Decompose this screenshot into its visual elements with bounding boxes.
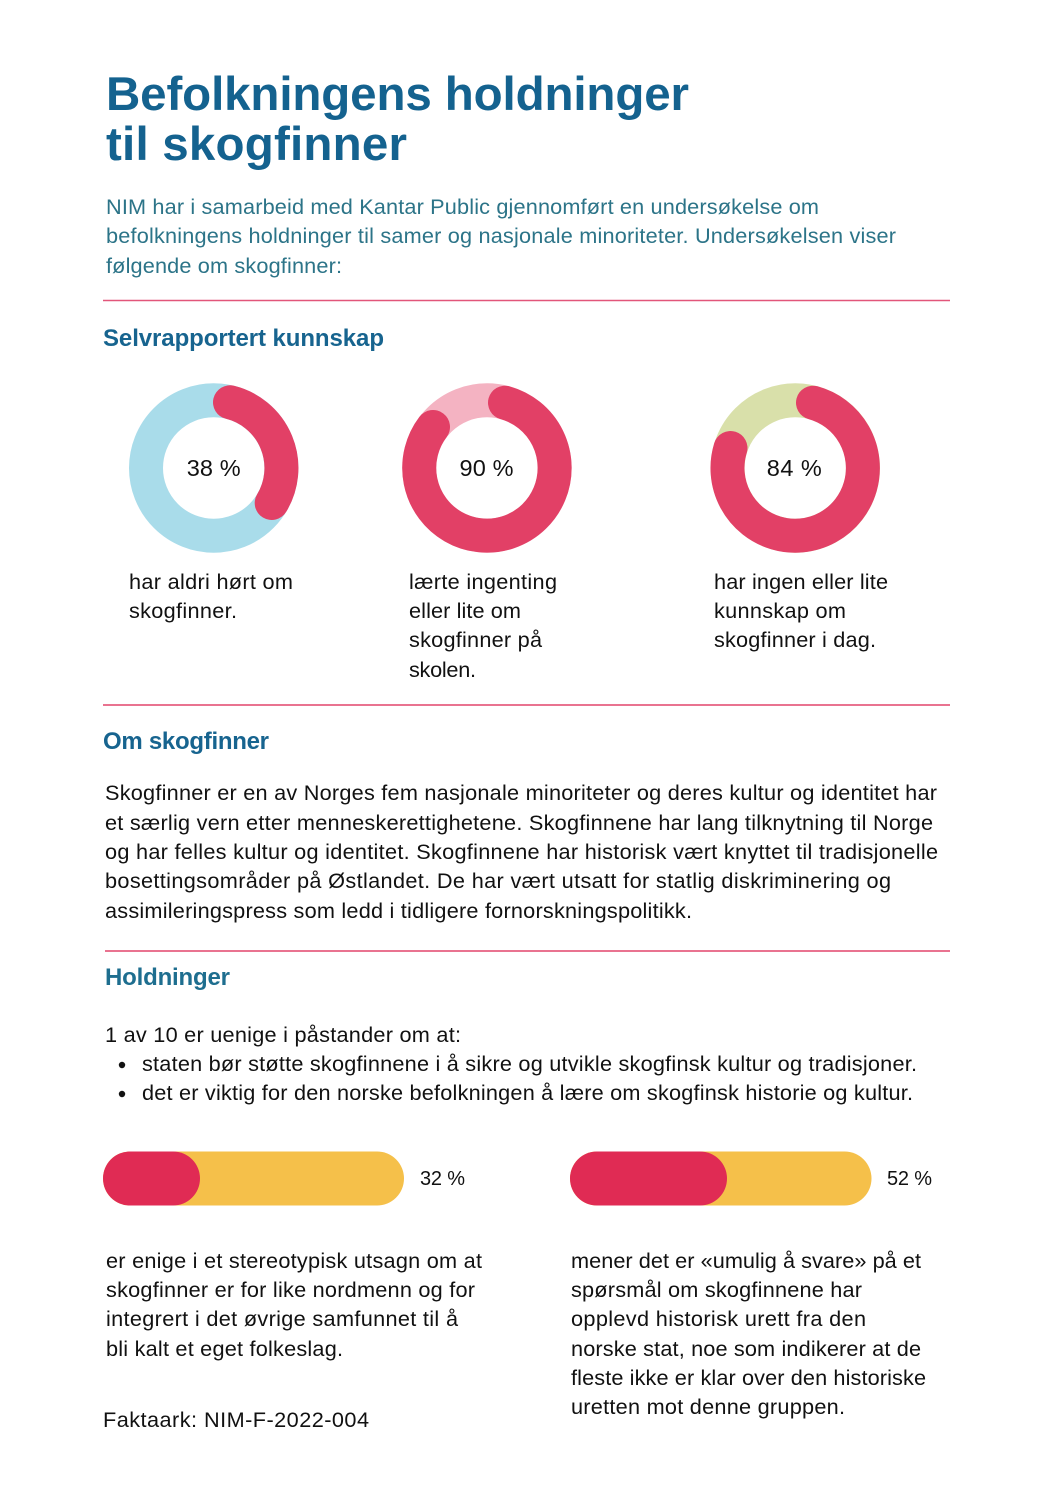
- donut chart: 84 %: 84 %: [767, 455, 822, 481]
- statement text with bullets: det er viktig for den norske befolkningen å lære om skogfinsk historie og kultur.: [142, 1080, 913, 1105]
- caption: 32 %: er enige i et stereotypisk utsagn om at: [106, 1248, 482, 1273]
- caption: 52 %: [571, 1248, 926, 1419]
- body text: Om skogfinner: og har felles kultur og identitet. Skogfinnene har historisk vært knyttet til tradisjonelle: [105, 839, 938, 864]
- title: Befolkningens holdninger: [106, 68, 689, 121]
- footer: fact sheet reference: Faktaark: NIM-F-2022-004: [103, 1407, 369, 1432]
- caption: 52 %: uretten mot denne gruppen.: [571, 1394, 845, 1419]
- caption: 38 %: har aldri hørt om: [129, 569, 293, 594]
- donut chart: 84 %: [727, 400, 863, 536]
- progress bar: 52 %: [570, 1152, 932, 1206]
- caption: 38 %: skogfinner.: [129, 598, 237, 623]
- body text: Om skogfinner: bosettingsområder på Østlandet. De har vært utsatt for statlig diskriminering og: [105, 868, 891, 893]
- body text: Om skogfinner: Skogfinner er en av Norges fem nasjonale minoriteter og deres kultur og identitet har: [105, 780, 937, 805]
- statement text with bullets: 1 av 10 er uenige i påstander om at:: [105, 1022, 461, 1047]
- heading: Selvrapportert kunnskap: Selvrapportert kunnskap: [103, 325, 384, 352]
- caption: 32 %: integrert i det øvrige samfunnet til å: [106, 1306, 459, 1331]
- caption: 90 %: lærte ingenting: [409, 569, 557, 594]
- caption: 84 %: skogfinner i dag.: [714, 627, 876, 652]
- title: [106, 68, 689, 171]
- caption: 84 %: [714, 569, 888, 652]
- intro text: følgende om skogfinner:: [106, 253, 342, 278]
- progress bar: 32 %: [103, 1152, 465, 1206]
- donut chart: 90 %: [419, 400, 555, 536]
- statement text with bullets: staten bør støtte skogfinnene i å sikre og utvikle skogfinsk kultur og tradisjoner.: [142, 1051, 917, 1076]
- caption: 32 %: bli kalt et eget folkeslag.: [106, 1336, 343, 1361]
- heading: Holdninger: Holdninger: [105, 964, 230, 991]
- heading: Om skogfinner: Om skogfinner: [103, 728, 269, 755]
- caption: 52 %: fleste ikke er klar over den historiske: [571, 1365, 926, 1390]
- donut chart: 38 %: 38 %: [187, 455, 241, 481]
- caption: 84 %: har ingen eller lite: [714, 569, 888, 594]
- intro text: NIM har i samarbeid med Kantar Public gjennomført en undersøkelse om: [106, 194, 819, 219]
- intro text: befolkningens holdninger til samer og nasjonale minoriteter. Undersøkelsen viser: [106, 223, 896, 248]
- caption: 52 %: opplevd historisk urett fra den: [571, 1306, 866, 1331]
- donut chart: 38 %: [146, 400, 281, 536]
- caption: 90 %: [409, 569, 557, 682]
- body text: Om skogfinner: assimileringspress som ledd i tidligere fornorskningspolitikk.: [105, 898, 692, 923]
- progress bar: 52 %: 52 %: [887, 1168, 932, 1190]
- caption: 52 %: mener det er «umulig å svare» på et: [571, 1248, 921, 1273]
- caption: 90 %: skogfinner på: [409, 627, 543, 652]
- caption: 38 %: [129, 569, 293, 623]
- caption: 52 %: spørsmål om skogfinnene har: [571, 1277, 862, 1302]
- statement text with bullets: [105, 1022, 917, 1105]
- caption: 90 %: skolen.: [409, 657, 476, 682]
- progress bar: 32 %: 32 %: [420, 1168, 465, 1190]
- intro text: [106, 194, 896, 278]
- donut chart: 90 %: 90 %: [460, 455, 514, 481]
- body text: Om skogfinner: et særlig vern etter menneskerettighetene. Skogfinnene har lang tilknytning til Norge: [105, 810, 933, 835]
- title: til skogfinner: [106, 118, 407, 171]
- caption: 84 %: kunnskap om: [714, 598, 846, 623]
- body text: Om skogfinner: [105, 780, 938, 923]
- caption: 52 %: norske stat, noe som indikerer at de: [571, 1336, 921, 1361]
- caption: 90 %: eller lite om: [409, 598, 521, 623]
- caption: 32 %: skogfinner er for like nordmenn og for: [106, 1277, 475, 1302]
- caption: 32 %: [106, 1248, 482, 1361]
